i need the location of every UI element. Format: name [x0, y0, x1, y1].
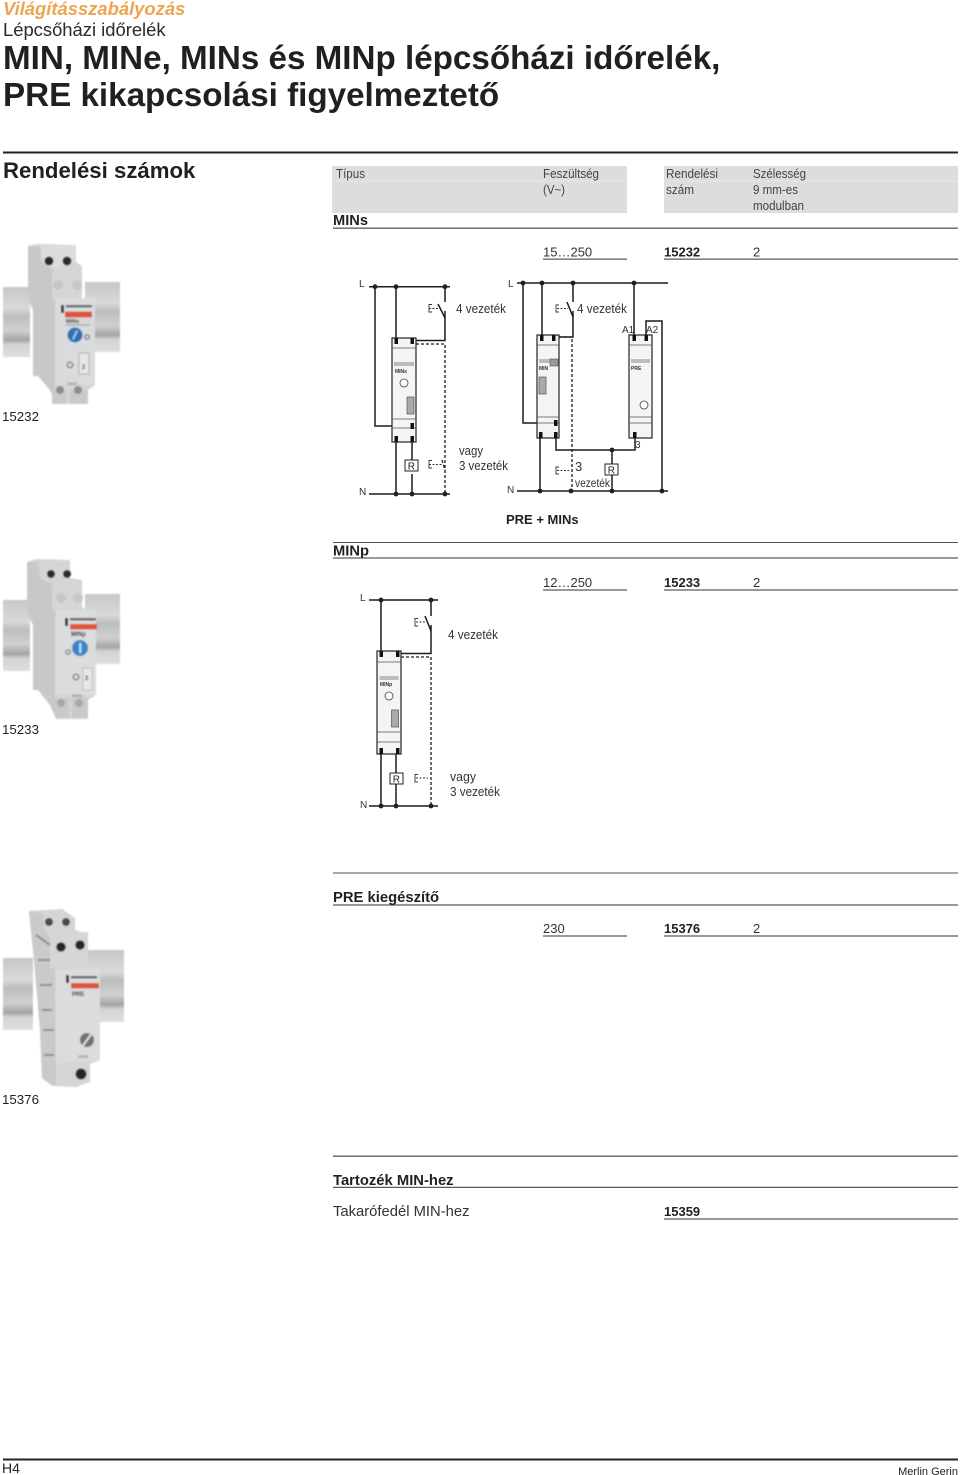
row: PRE accessory: PRE kiegészítő [333, 890, 439, 906]
photo: MINs device 15232: 15232 [67, 382, 77, 386]
terminal labels [622, 325, 659, 451]
device: MINp [377, 651, 401, 754]
footer [2, 1458, 958, 1475]
wiring text: 4 vezeték [456, 302, 507, 316]
section heading: order numbers: Rendelési számok [3, 158, 196, 183]
diagram caption: PRE + MINs [506, 512, 579, 527]
wiring text: 3 vezeték [459, 459, 509, 473]
L and N labels: L [359, 279, 365, 290]
row: MINp: 2 [753, 575, 760, 590]
L and N labels [507, 279, 514, 496]
wiring text: 3 [575, 459, 582, 474]
L and N labels: L [508, 279, 514, 290]
photo: MINs device 15232 [3, 244, 120, 404]
row: PRE accessory [333, 872, 958, 936]
photo: PRE device 15376: 15376 [78, 1055, 88, 1059]
load: R [390, 773, 403, 786]
wiring text: 4 vezeték [577, 302, 628, 316]
row: MINs: 2 [753, 244, 760, 260]
photo: PRE device 15376 [3, 909, 124, 1087]
photo: MINs device 15232: MINs [66, 319, 79, 325]
photo: PRE device 15376: PRE [72, 992, 84, 998]
wiring text [575, 302, 628, 490]
terminal labels: A1 [622, 325, 635, 336]
table header [332, 166, 958, 213]
wiring diagram: PRE + MINs [506, 279, 668, 527]
main title second line: PRE kikapcsolási figyelmeztető [3, 77, 499, 114]
row: PRE accessory: 230 [543, 921, 565, 936]
label: 15232: 15232 [2, 409, 39, 424]
wiring text: vagy [450, 770, 477, 784]
L and N labels [360, 593, 367, 811]
label: 15376: 15376 [2, 1092, 39, 1107]
wiring diagram: MINs [359, 279, 509, 498]
table header: Feszültség [543, 167, 599, 181]
row: accessory: Takarófedél MIN-hez [333, 1204, 470, 1220]
row: accessory [333, 1156, 958, 1220]
L and N labels: N [507, 485, 514, 496]
wiring text [456, 302, 509, 473]
table header: Típus [336, 167, 365, 181]
wiring text: 3 vezeték [450, 785, 501, 799]
L and N labels: L [360, 593, 366, 604]
table header: Rendelési [666, 167, 718, 181]
label: 15233: 15233 [2, 722, 39, 737]
row: MINp: MINp [333, 544, 369, 560]
row: PRE accessory: 15376 [664, 921, 700, 936]
photo: MINp device 15233: 2 [85, 676, 89, 682]
wiring text: vezeték [575, 476, 611, 490]
wiring diagram: MINp [360, 593, 501, 811]
row: accessory: 15359 [664, 1204, 700, 1219]
load: R [605, 464, 618, 476]
terminal labels: 3 [635, 440, 641, 451]
row: MINs: 15…250 [543, 244, 592, 260]
row: MINp [333, 542, 958, 590]
main title: MIN, MINe, MINs és MINp lépcsőházi időrelék, [3, 40, 720, 77]
wiring text: 4 vezeték [448, 628, 499, 642]
device: MINs: MINs [395, 369, 407, 375]
device: MINs [392, 338, 416, 442]
table header: modulban [753, 199, 804, 213]
table header: (V~) [543, 183, 565, 197]
device: MIN [537, 335, 559, 438]
load: R: R [393, 774, 400, 786]
L and N labels [359, 279, 366, 498]
photo: MINs device 15232: 2 [82, 365, 86, 371]
device: MINp: MINp [380, 682, 392, 688]
load: R: R [608, 466, 615, 476]
device: PRE [629, 335, 652, 438]
page header [3, 0, 720, 114]
table header: szám [666, 183, 694, 197]
row: MINs: MINs [333, 213, 368, 229]
row: MINs: 15232 [664, 244, 700, 260]
device: MIN: MIN [539, 366, 549, 372]
row: MINp: 12…250 [543, 575, 592, 590]
table header: Szélesség [753, 167, 806, 181]
table header: 9 mm-es [753, 183, 798, 197]
wiring text: vagy [459, 444, 484, 458]
load: R: R [408, 462, 415, 472]
L and N labels: N [360, 800, 367, 811]
row: MINs [333, 213, 958, 260]
L and N labels: N [359, 487, 366, 498]
photo: MINp device 15233 [3, 559, 120, 719]
row: PRE accessory: 2 [753, 921, 760, 936]
row: MINp: 15233 [664, 575, 700, 590]
row: accessory: Tartozék MIN-hez [333, 1173, 454, 1189]
photo: MINp device 15233: MINp [71, 632, 86, 638]
wiring text [448, 628, 501, 799]
photo: MINp device 15233: 15233 [72, 694, 82, 698]
terminal labels: A2 [646, 325, 659, 336]
load: R [405, 460, 418, 472]
device: PRE: PRE [631, 366, 642, 372]
subtitle: Lépcsőházi időrelék [3, 19, 166, 40]
